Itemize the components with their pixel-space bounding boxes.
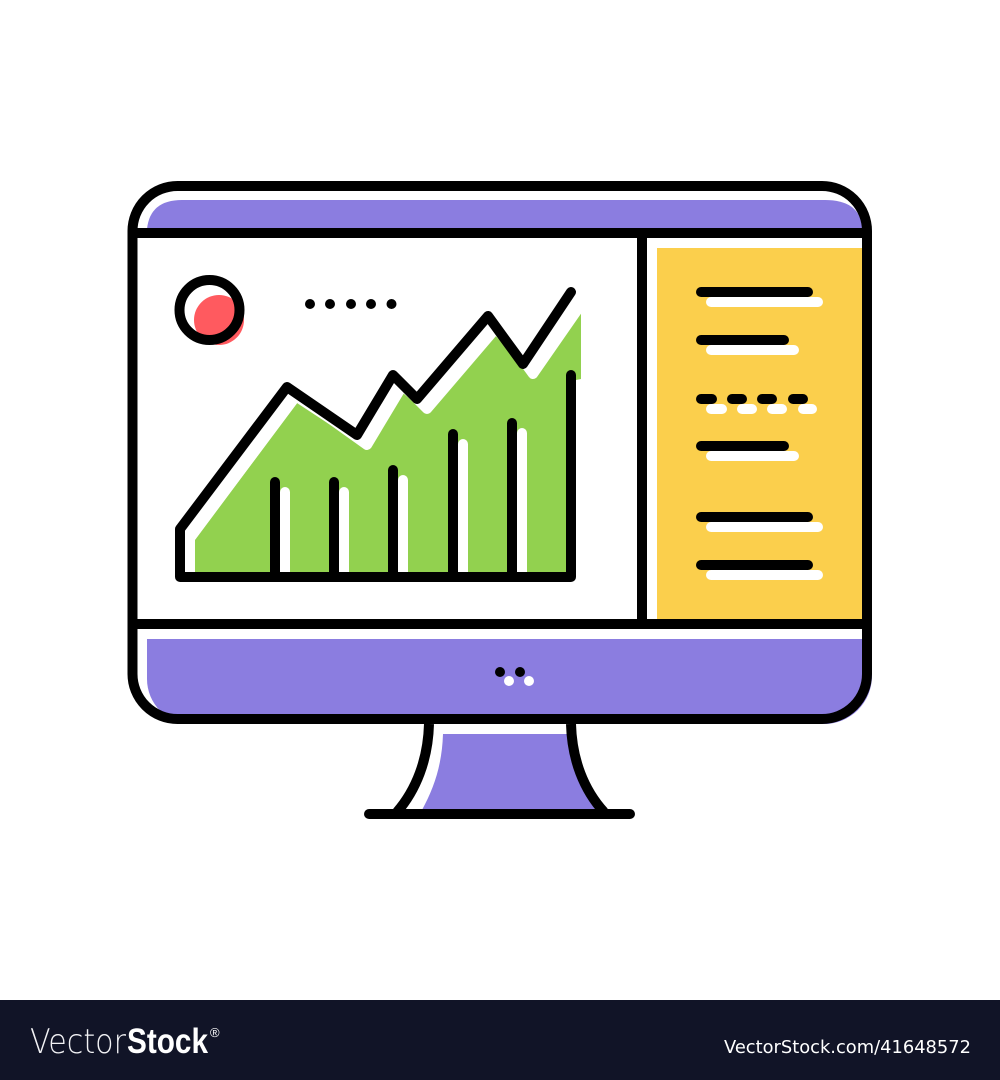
footer logo: Vector: [30, 1022, 126, 1062]
panel: purple stand fill: [422, 734, 603, 810]
icon: desktop monitor: [132, 186, 872, 814]
panel: top purple bar: [147, 200, 862, 229]
speaker dots: [495, 667, 534, 686]
black bars: [275, 423, 512, 577]
footer logo: Stock: [127, 1022, 208, 1061]
white bar highlights: [285, 433, 522, 572]
area fill: [195, 312, 581, 572]
sidebar text lines: [701, 292, 818, 575]
footer logo: [30, 1022, 208, 1062]
monitor outline: [132, 186, 867, 719]
icon: red circle: [180, 280, 244, 345]
stand outline: [369, 724, 630, 814]
five dots: [305, 299, 396, 309]
area white highlight line: [190, 302, 583, 577]
panel: bottom purple chin: [147, 639, 872, 724]
footer registered mark: ®: [210, 1025, 220, 1040]
footer bar: [0, 1000, 1000, 1080]
chart line and axes: [180, 292, 571, 577]
panel: yellow sidebar: [657, 248, 863, 620]
footer image id: VectorStock.com/41648572: [724, 1037, 971, 1058]
chart: green area with bars: [180, 292, 583, 577]
